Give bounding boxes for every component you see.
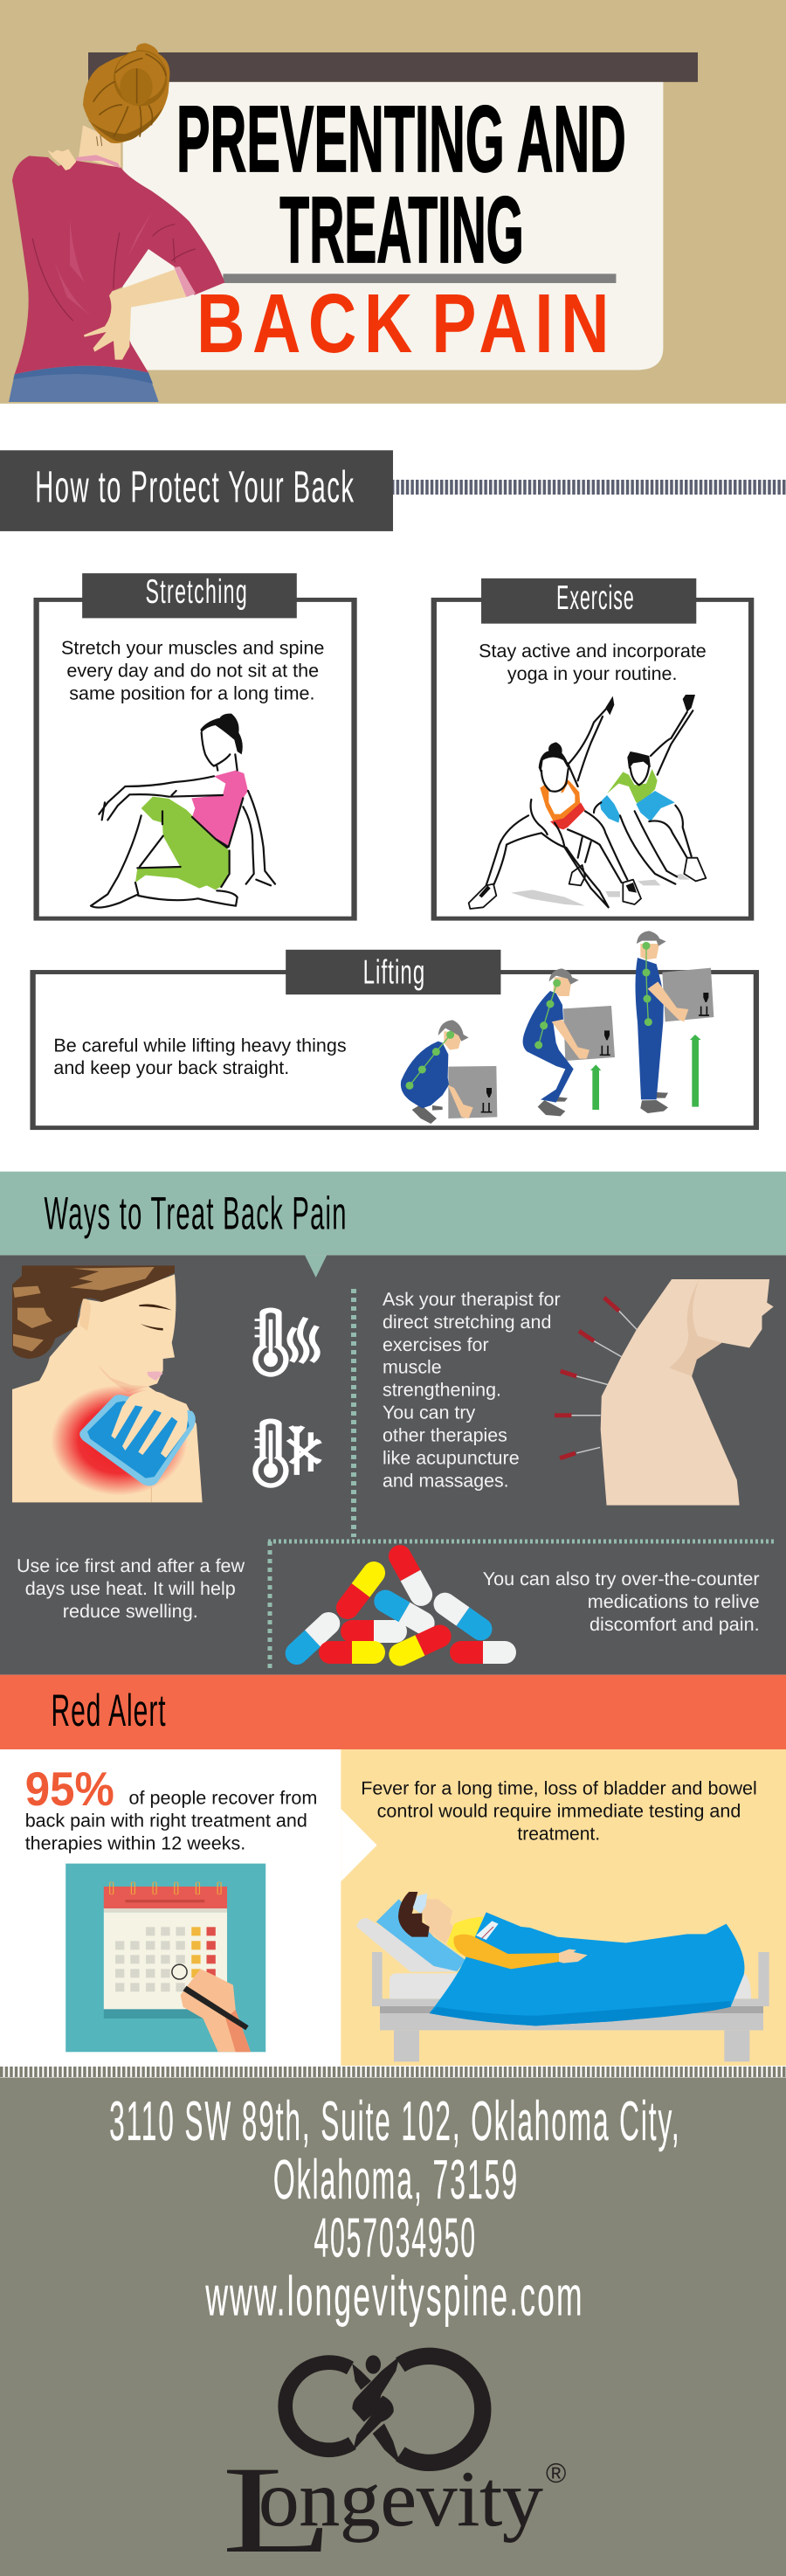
panel: footer contact bbox=[0, 2077, 786, 2576]
illustration: seated stretch bbox=[91, 714, 275, 908]
text: therapist advice: Ask your therapist for bbox=[383, 1288, 561, 1309]
text: fever warning: treatment. bbox=[517, 1823, 600, 1844]
text: therapist advice bbox=[383, 1288, 561, 1491]
panel: exercise: Exercise bbox=[556, 578, 635, 617]
panel: exercise bbox=[434, 578, 751, 918]
illustration: patient in bed bbox=[356, 1892, 769, 2061]
panel: header banner bbox=[0, 0, 786, 404]
illustration: pills bbox=[280, 1541, 516, 1670]
icon: cold thermometer bbox=[252, 1419, 321, 1488]
woman two, behind bbox=[569, 695, 706, 885]
panel: lifting: Lifting bbox=[363, 953, 425, 991]
panel: lifting: and keep your back straight. bbox=[53, 1057, 289, 1078]
text: over-the-counter medications bbox=[483, 1568, 760, 1635]
illustration: acupuncture on neck bbox=[555, 1279, 774, 1506]
panel: stretching: every day and do not sit at the bbox=[66, 661, 319, 681]
rising worker bbox=[523, 968, 615, 1116]
woman one, front bbox=[469, 696, 641, 909]
section heading: Red Alert bbox=[0, 1675, 786, 1749]
panel: exercise: yoga in your routine. bbox=[507, 663, 677, 684]
arrow: tall bbox=[690, 1035, 701, 1107]
text: therapist advice: and massages. bbox=[383, 1470, 509, 1491]
panel: exercise: Stay active and incorporate bbox=[479, 641, 707, 661]
panel: lifting bbox=[33, 950, 756, 1128]
panel: stretching: Stretching bbox=[145, 572, 248, 610]
text: therapist advice: other therapies bbox=[383, 1424, 507, 1445]
text: ice first: reduce swelling. bbox=[63, 1601, 198, 1622]
panel: ways to treat back pain bbox=[0, 1172, 786, 1674]
text: ice first bbox=[17, 1555, 245, 1622]
panel: stretching: same position for a long time. bbox=[69, 683, 314, 703]
crouching worker bbox=[401, 1020, 497, 1124]
section heading: How to Protect Your Back bbox=[0, 450, 393, 531]
illustration: woman holding her back bbox=[9, 43, 224, 402]
text: 95 percent recovery: of people recover from bbox=[129, 1787, 317, 1808]
logo wordmark bbox=[222, 2441, 566, 2576]
text: address and contact bbox=[109, 2090, 680, 2327]
title bbox=[176, 86, 626, 370]
text: 95 percent recovery: back pain with right treatment and bbox=[25, 1810, 307, 1831]
text: therapist advice: You can try bbox=[383, 1402, 475, 1423]
illustration: two people exercising bbox=[469, 695, 706, 909]
logo wordmark: L bbox=[222, 2441, 334, 2576]
panel: stretching bbox=[37, 572, 355, 918]
text: therapist advice: like acupuncture bbox=[383, 1447, 520, 1468]
text: 95 percent recovery: therapies within 12 weeks. bbox=[25, 1832, 245, 1853]
standing worker bbox=[635, 931, 714, 1113]
logo mark bbox=[286, 2355, 483, 2464]
panel: stretching: Stretch your muscles and spine bbox=[61, 638, 324, 658]
text: therapist advice: strengthening. bbox=[383, 1379, 501, 1400]
logo wordmark: ® bbox=[546, 2458, 566, 2489]
icon: heat thermometer bbox=[252, 1307, 317, 1377]
dotted dividers bbox=[268, 1289, 774, 1674]
text: 95 percent recovery bbox=[25, 1762, 317, 1853]
stripe strip bbox=[393, 480, 786, 495]
illustration: calendar and hand bbox=[66, 1864, 265, 2052]
logo: Longevity bbox=[222, 2355, 566, 2576]
section heading: Red Alert: Red Alert bbox=[52, 1685, 167, 1735]
panel: red alert bbox=[0, 1669, 786, 2066]
stripe strip bbox=[0, 2067, 786, 2077]
text: 95 percent recovery: 95% bbox=[25, 1762, 114, 1816]
text: ice first: Use ice first and after a few bbox=[17, 1555, 245, 1576]
illustration: woman with cold pack bbox=[12, 1265, 203, 1502]
text: therapist advice: muscle bbox=[383, 1356, 442, 1377]
logo wordmark: ongevity bbox=[259, 2455, 543, 2543]
text: fever warning bbox=[361, 1777, 757, 1844]
text: ice first: days use heat. It will help bbox=[25, 1578, 236, 1599]
text: therapist advice: exercises for bbox=[383, 1333, 489, 1354]
illustration: lifting workers bbox=[401, 931, 714, 1124]
arrow: short bbox=[590, 1064, 601, 1110]
panel: lifting: Be careful while lifting heavy things bbox=[53, 1035, 347, 1056]
text: therapist advice: direct stretching and bbox=[383, 1311, 551, 1332]
section heading: Ways to Treat Back Pain bbox=[0, 1172, 786, 1278]
